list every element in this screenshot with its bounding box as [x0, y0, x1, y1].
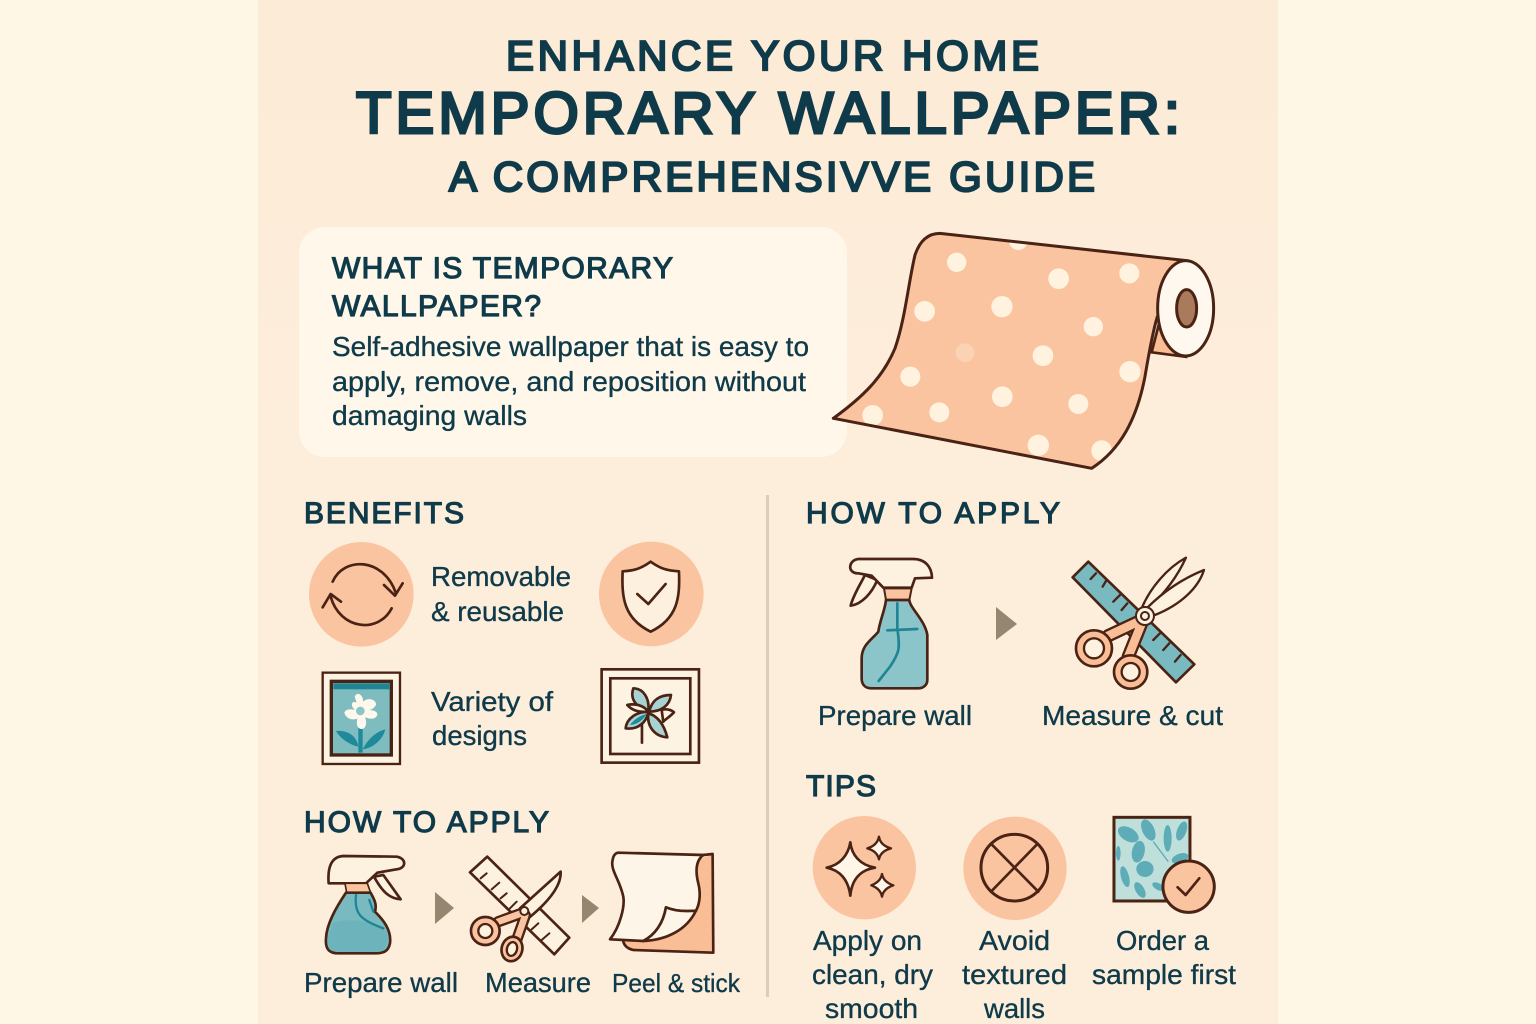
icon: sparkles — [813, 816, 916, 919]
definition text — [332, 331, 809, 431]
tip text: avoid textured walls: walls — [983, 993, 1045, 1024]
label: removable and reusable — [431, 561, 571, 627]
definition text: apply, remove, and reposition without — [332, 366, 806, 397]
icon: sample swatch with check — [1114, 817, 1214, 912]
section: benefits — [304, 497, 704, 764]
icon: spray bottle large — [850, 559, 932, 688]
section: how to apply (right) — [806, 497, 1223, 731]
tip text: clean surface: Apply on — [813, 925, 922, 956]
icon: framed leaf pattern — [602, 669, 699, 763]
step labels: Prepare wall — [304, 967, 458, 998]
section: tips — [806, 770, 1236, 1024]
step labels: Measure — [485, 967, 591, 998]
icon: shield with check — [599, 542, 704, 646]
label: variety of designs: designs — [432, 720, 527, 751]
title: TEMPORARY WALLPAPER: — [356, 81, 1180, 146]
tip text: avoid textured walls — [962, 925, 1067, 1024]
step labels right: Measure & cut — [1042, 700, 1223, 731]
divider — [766, 495, 769, 997]
tip text: order a sample: Order a — [1116, 925, 1210, 956]
step labels — [304, 967, 741, 998]
heading: how to apply right: HOW TO APPLY — [806, 497, 1060, 530]
title: ENHANCE YOUR HOME — [506, 32, 1039, 79]
central panel — [258, 0, 1278, 1024]
arrow — [996, 607, 1017, 640]
arrow — [435, 892, 454, 924]
tip text: order a sample — [1092, 925, 1236, 990]
icon: spray bottle — [326, 856, 404, 953]
heading: benefits: BENEFITS — [304, 497, 464, 530]
definition text: damaging walls — [332, 400, 527, 431]
tip text: clean surface — [812, 925, 933, 1024]
label: variety of designs — [431, 686, 553, 751]
step labels right — [818, 700, 1223, 731]
icon: ruler and scissors — [470, 857, 569, 964]
label: removable and reusable: & reusable — [431, 596, 564, 627]
arrow — [582, 895, 599, 923]
icon: crossed circle — [963, 817, 1067, 920]
tip text: clean surface: clean, dry — [812, 959, 933, 990]
label: removable and reusable: Removable — [431, 561, 571, 592]
section: how to apply (left) — [304, 806, 741, 998]
tip text: avoid textured walls: Avoid — [979, 925, 1050, 956]
heading: how to apply left: HOW TO APPLY — [304, 806, 549, 839]
icon: framed flower pattern — [323, 673, 400, 764]
heading: what is temporary wallpaper: WHAT IS TEMPORARY — [332, 252, 673, 285]
title: A COMPREHENSIVVE GUIDE — [449, 153, 1095, 200]
label: variety of designs: Variety of — [431, 686, 553, 717]
tip text: clean surface: smooth — [825, 993, 918, 1024]
icon: ruler and scissors large — [1073, 558, 1204, 689]
tip text: order a sample: sample first — [1092, 959, 1236, 990]
icon: wallpaper roll — [833, 231, 1214, 468]
definition text: Self-adhesive wallpaper that is easy to — [332, 331, 809, 362]
step labels: Peel & stick — [612, 968, 741, 998]
step labels right: Prepare wall — [818, 700, 972, 731]
heading: tips: TIPS — [806, 770, 876, 803]
title — [356, 32, 1180, 200]
icon: reuse arrows — [309, 542, 414, 647]
tip text: avoid textured walls: textured — [962, 959, 1067, 990]
heading: what is temporary wallpaper — [332, 252, 673, 323]
panel: what is temporary wallpaper — [299, 227, 847, 457]
icon: peel and stick sheet — [610, 853, 713, 953]
heading: what is temporary wallpaper: WALLPAPER? — [332, 290, 541, 323]
